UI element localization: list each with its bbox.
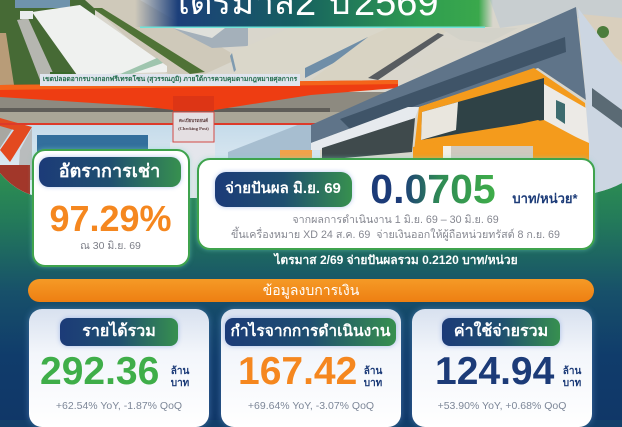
checking post sign: ตะเบียบรถยนต์ <box>179 118 208 123</box>
occupancy date: ณ 30 มิ.ย. 69 <box>80 240 141 252</box>
profit value: 167.42 <box>238 350 357 393</box>
distribution value: 0.0705 <box>370 166 496 212</box>
occupancy value: 97.29% <box>49 198 172 239</box>
panel: total expenses <box>412 309 592 427</box>
revenue value: 292.36 <box>40 350 159 393</box>
expenses unit: บาท <box>563 378 581 388</box>
right wall <box>578 8 622 200</box>
quarterly distribution note: ไตรมาส 2/69 จ่ายปันผลรวม 0.2120 บาท/หน่วย <box>274 253 518 267</box>
panel: occupancy rate <box>32 149 190 267</box>
profit unit: บาท <box>364 378 382 388</box>
expenses unit <box>562 365 582 388</box>
red gate band <box>0 80 398 110</box>
revenue unit <box>170 365 190 388</box>
distribution label: จ่ายปันผล มิ.ย. 69 <box>225 180 341 196</box>
banner title <box>172 0 439 24</box>
expenses change: +53.90% YoY, +0.68% QoQ <box>438 400 566 412</box>
occupancy label <box>38 156 180 186</box>
profit unit <box>364 365 382 388</box>
heading: financial data: ข้อมูลงบการเงิน <box>263 282 359 298</box>
panel: operating profit <box>221 309 401 427</box>
occupancy label: อัตราการเช่า <box>59 160 160 180</box>
revenue change: +62.54% YoY, -1.87% QoQ <box>56 400 182 412</box>
aerial buildings, centre <box>173 28 248 48</box>
panel: distribution <box>197 158 595 250</box>
checking post sign <box>178 118 209 131</box>
grey roof <box>311 7 586 143</box>
revenue unit: บาท <box>171 378 189 388</box>
orange building <box>414 68 586 147</box>
distribution unit: บาท/หน่วย* <box>512 191 578 206</box>
distribution period and dates: จากผลการดำเนินงาน 1 มิ.ย. 69 – 30 มิ.ย. 69 <box>292 214 499 226</box>
sky and background buildings <box>0 125 320 200</box>
distribution period and dates <box>231 214 560 241</box>
expenses unit: ล้าน <box>563 366 581 377</box>
heading: financial data <box>28 279 594 302</box>
revenue label: รายได้รวม <box>82 323 156 340</box>
profit label <box>225 318 396 346</box>
distribution period and dates: ขึ้นเครื่องหมาย XD 24 ส.ค. 69 จ่ายเงินออกให้ผู้ถือหน่วยทรัสต์ 8 ก.ย. 69 <box>231 228 560 240</box>
aerial ground, left <box>0 0 95 85</box>
revenue label <box>60 318 178 346</box>
gate underside <box>0 92 410 125</box>
expenses value: 124.94 <box>435 350 554 393</box>
distribution label <box>214 172 352 206</box>
panel: total revenue <box>29 309 209 427</box>
profit unit: ล้าน <box>364 366 382 377</box>
checking post sign: (Checking Post) <box>178 126 209 131</box>
gate sign text: เขตปลอดอากรบางกอกฟรีเทรดโซน (สุวรรณภูมิ) ภายใต้การควบคุมตามกฎหมายศุลกากร <box>43 76 297 83</box>
profit change: +69.64% YoY, -3.07% QoQ <box>248 400 374 412</box>
revenue unit: ล้าน <box>171 366 189 377</box>
expenses label: ค่าใช้จ่ายรวม <box>454 323 548 340</box>
expenses label <box>442 318 560 346</box>
profit label: กำไรจากการดำเนินงาน <box>231 323 390 340</box>
